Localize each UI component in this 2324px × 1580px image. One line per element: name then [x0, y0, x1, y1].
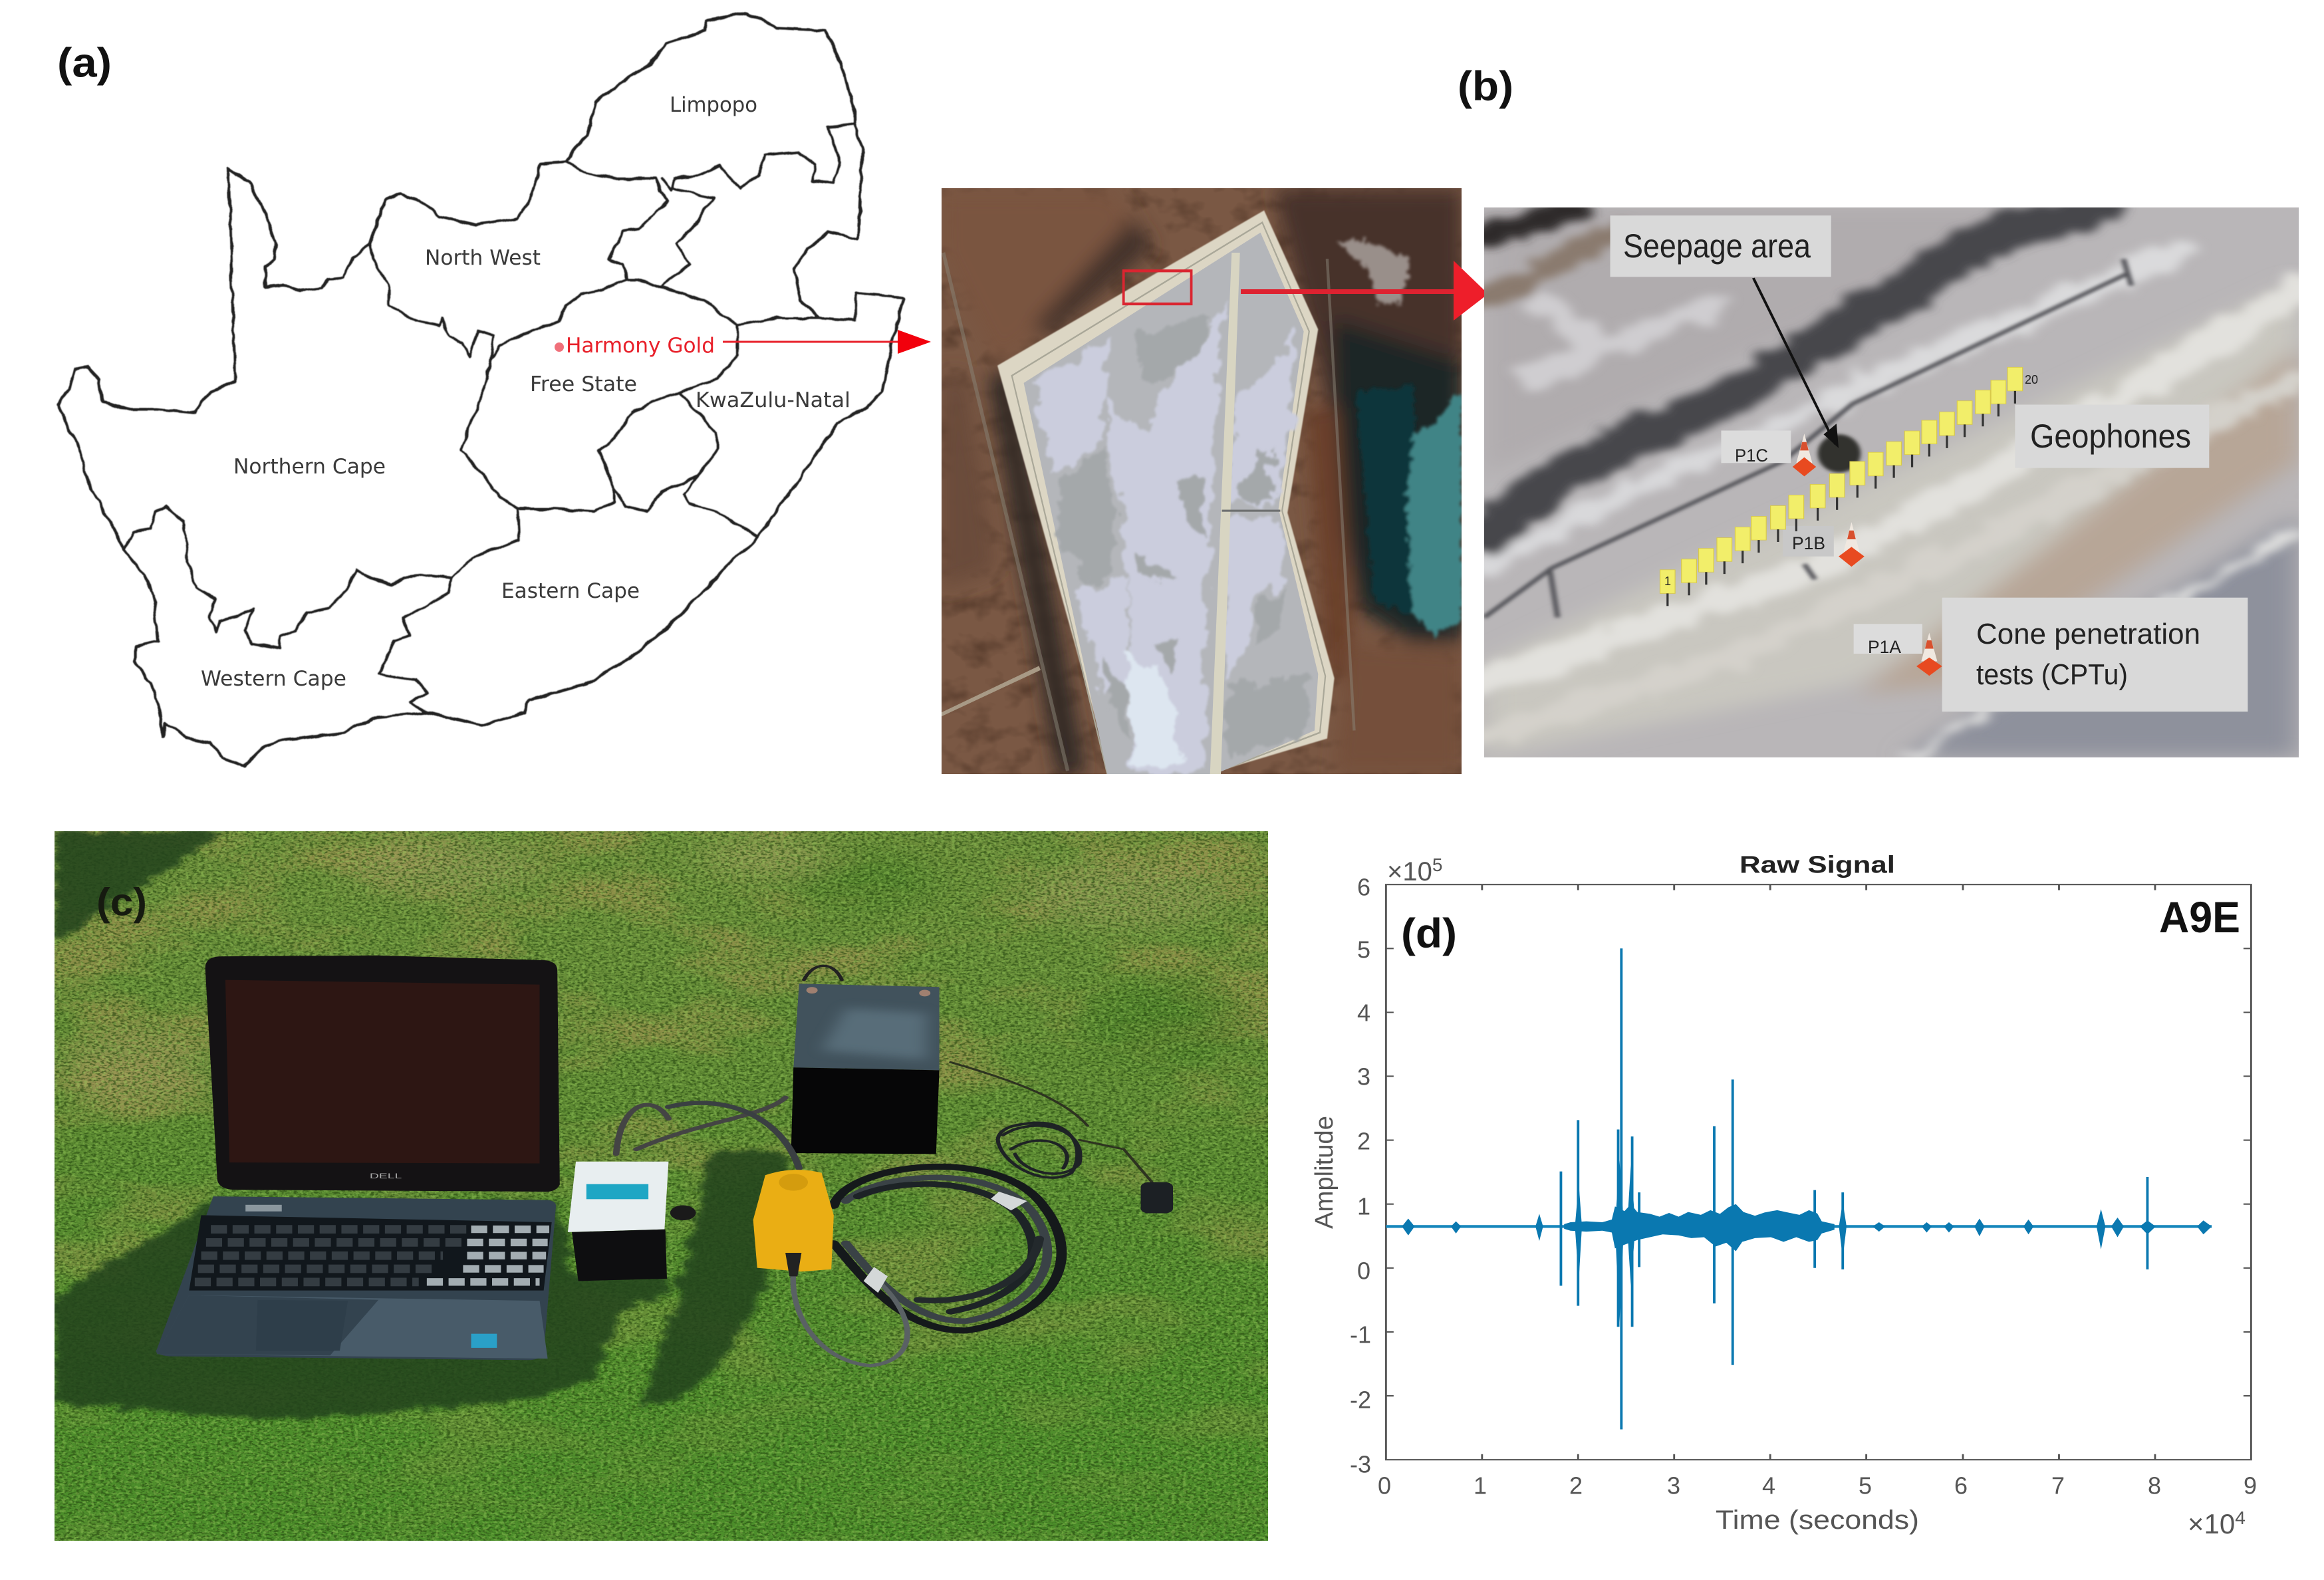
y axis labels: 1: [1357, 1193, 1370, 1220]
y axis exponent: ×10: [1387, 857, 1432, 886]
label box: Geophones: [2015, 405, 2209, 468]
marker label: P1B: P1B: [1792, 533, 1825, 553]
y axis labels: [1350, 874, 1371, 1478]
label box: P1B: [1783, 526, 1834, 557]
x axis labels: 1: [1474, 1472, 1487, 1499]
panel b: satellite view of tailings storage facility: [942, 188, 1462, 774]
label box: Seepage area: [1611, 215, 1831, 277]
x axis labels: 2: [1569, 1472, 1583, 1499]
map outlines of provinces: [57, 13, 903, 766]
y axis labels: 5: [1357, 936, 1370, 963]
panel c: field equipment photo on grass: [55, 831, 1268, 1541]
x axis exponent: 4: [2235, 1508, 2246, 1528]
province name: Limpopo: Limpopo: [670, 93, 757, 117]
chart title: Raw Signal: [1740, 851, 1895, 878]
ground shadows: [55, 831, 793, 1420]
x axis exponent: ×10: [2188, 1508, 2235, 1539]
geophone number 1: 1: [1664, 575, 1671, 588]
x axis labels: 8: [2148, 1472, 2161, 1499]
x axis labels: 6: [1954, 1472, 1968, 1499]
y axis labels: -1: [1350, 1321, 1371, 1349]
y axis labels: 4: [1357, 999, 1370, 1027]
axes frame: [1386, 884, 2251, 1460]
x axis labels: 4: [1762, 1472, 1775, 1499]
geophone number 20: 20: [2025, 373, 2038, 386]
laptop: [156, 956, 560, 1360]
sensor label A9E: A9E: [2159, 892, 2240, 942]
battery: [791, 984, 940, 1154]
province name: Free State: Free State: [530, 372, 637, 396]
arrow: overview to site detail: [1241, 261, 1488, 321]
tick marks: [1386, 884, 2251, 1460]
site marker: Harmony Gold: Harmony Gold: [566, 334, 715, 358]
icon: cone P1C: [1793, 434, 1816, 476]
callout: Seepage area: Seepage area: [1623, 227, 1811, 265]
y axis labels: 6: [1357, 874, 1370, 900]
panel d: raw signal line chart: [1311, 851, 2257, 1539]
marker label: P1C: P1C: [1735, 446, 1768, 465]
y axis labels: 0: [1357, 1257, 1370, 1285]
province name: Northern Cape: Northern Cape: [233, 455, 386, 479]
label box: P1C: [1721, 431, 1791, 463]
y axis labels: -2: [1350, 1386, 1371, 1414]
y axis labels: -3: [1350, 1451, 1371, 1478]
chart plot: axes and waveform: [1384, 884, 2252, 1460]
inset marker: seepage location rectangle: [1124, 271, 1192, 304]
arrow: map to satellite view: [723, 330, 931, 354]
panel label b: (b): [1458, 64, 1513, 109]
marker label: P1A: P1A: [1868, 637, 1901, 657]
cables: [616, 966, 1152, 1366]
geophone array markers: [1660, 367, 2023, 606]
x axis labels: 3: [1667, 1472, 1680, 1499]
callout: Cone penetration tests (CPTu): [1976, 618, 2200, 691]
province name: North West: North West: [425, 246, 541, 270]
callout: Geophones: Geophones: [2030, 418, 2191, 455]
waveform: [1386, 948, 2212, 1430]
x axis labels: 0: [1378, 1472, 1391, 1499]
callout: Cone penetration tests (CPTu): Cone penetration: [1976, 618, 2200, 650]
x axis labels: 5: [1859, 1472, 1872, 1499]
province name: Western Cape: Western Cape: [201, 667, 346, 691]
province name: Eastern Cape: Eastern Cape: [501, 579, 640, 603]
y axis labels: 3: [1357, 1063, 1370, 1091]
y axis labels: 2: [1357, 1128, 1370, 1154]
label box: P1A: [1854, 624, 1922, 654]
grass background: [55, 831, 1268, 1541]
panel b: site detail with geophones and CPTu: [1484, 207, 2299, 757]
x axis labels: 7: [2051, 1472, 2065, 1499]
GPS antenna: [1141, 1182, 1173, 1214]
callout: Cone penetration tests (CPTu): tests (CPTu): [1976, 658, 2128, 691]
province name: KwaZulu-Natal: KwaZulu-Natal: [696, 388, 850, 412]
x axis labels: [1378, 1472, 2257, 1499]
y axis title: Amplitude: [1311, 1116, 1339, 1229]
panel label a: (a): [57, 40, 112, 86]
arrow: seepage pointer: [1753, 278, 1839, 448]
panel label c: (c): [96, 880, 147, 924]
data logger box: [568, 1162, 696, 1281]
label box: Cone penetration tests: [1942, 598, 2248, 712]
icon: cone P1B: [1839, 522, 1865, 567]
geophone sensor: [753, 1170, 834, 1276]
panel a: province map of South Africa: [57, 13, 931, 766]
x axis labels: 9: [2244, 1472, 2257, 1499]
icon: cone P1A: [1916, 632, 1942, 676]
x axis title: Time (seconds): [1716, 1506, 1919, 1535]
y axis exponent: 5: [1432, 855, 1442, 875]
laptop: DELL: [370, 1172, 402, 1180]
panel label d: (d): [1401, 911, 1457, 956]
